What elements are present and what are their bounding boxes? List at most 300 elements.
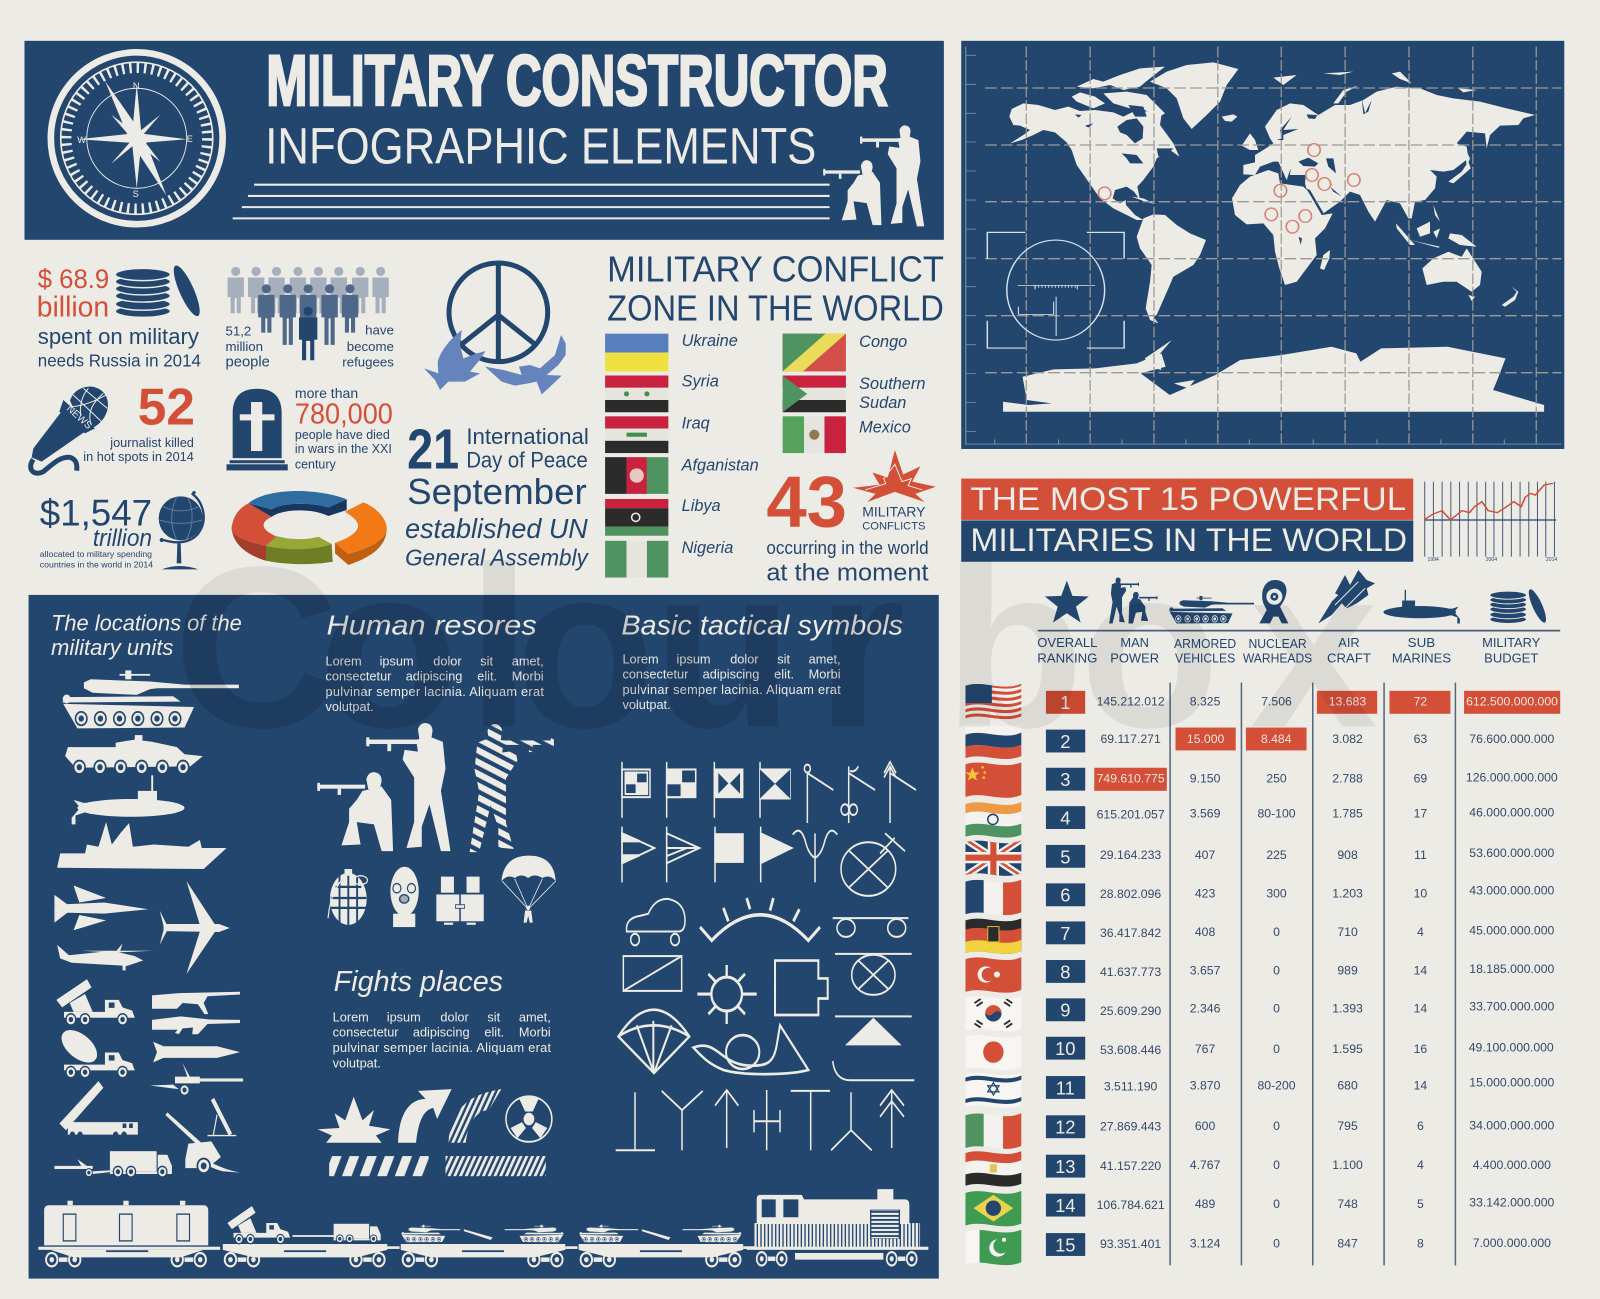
- stat: 1,547 trillion: allocated to military spending: [40, 549, 152, 559]
- text: fights places paragraph: Morbi: [519, 1025, 551, 1040]
- flag: Turkey: [965, 956, 1021, 995]
- row 1: USA: 1: [1060, 692, 1070, 713]
- text: International Day of Peace: International: [466, 424, 589, 449]
- text: tactical symbols paragraph: adipiscing: [703, 667, 759, 682]
- subtitle: INFOGRAPHIC ELEMENTS: [265, 117, 816, 174]
- row 9: South Korea: [965, 995, 1555, 1034]
- icon: bomber plane: [160, 881, 230, 974]
- stat: 1,547 trillion: $1,547: [40, 493, 152, 534]
- flag: China: [965, 761, 1021, 800]
- row 5: United Kingdom: 11: [1414, 848, 1427, 862]
- row 3: China: 9.150: [1190, 772, 1221, 786]
- text: human resources paragraph: Lorem: [326, 653, 362, 668]
- flag: Israel: [965, 1071, 1021, 1110]
- text: human resources paragraph: consectetur: [326, 669, 392, 684]
- tactical symbols: [616, 762, 916, 1150]
- text: human resources paragraph: volutpat.: [326, 699, 374, 714]
- text: tactical symbols paragraph: Morbi: [809, 667, 841, 682]
- stat: refugees people pictogram: [226, 267, 394, 370]
- icon: submarine: [72, 775, 185, 824]
- stat: 1,547 trillion: trillion: [93, 525, 152, 552]
- row 4: India: 3.569: [1190, 807, 1221, 821]
- row 10: Japan: 16: [1414, 1042, 1427, 1056]
- text: International Day of Peace: Day of Peace: [466, 447, 588, 472]
- row 10: Japan: 1.595: [1332, 1042, 1363, 1056]
- row 8: Turkey: 989: [1337, 963, 1358, 977]
- text: tactical symbols paragraph: Lorem: [622, 651, 659, 666]
- stat: 780,000 died: people have died: [295, 427, 390, 442]
- icon: striped arrow: [449, 1089, 501, 1143]
- text: human resources paragraph: dolor: [433, 653, 462, 668]
- row 14: Brazil: 489: [1195, 1197, 1215, 1211]
- stat: refugees people pictogram: become: [347, 339, 394, 354]
- icon: explosion: [318, 1097, 390, 1143]
- row 12: Italy: [965, 1112, 1555, 1151]
- banner: most 15 powerful militaries: MILITARIES IN THE WORLD: [970, 521, 1407, 558]
- text: human resources paragraph: Morbi: [512, 669, 544, 684]
- icon: standing soldier: [366, 723, 450, 851]
- text: fights places paragraph: pulvinar semper lacinia. Aliquam erat: [333, 1040, 551, 1055]
- icon: compass: W: [77, 135, 86, 145]
- flag: Brazil: [965, 1190, 1021, 1229]
- row 11: Israel: 680: [1337, 1078, 1358, 1092]
- row 8: Turkey: 8: [1060, 961, 1070, 982]
- row 11: Israel: [965, 1071, 1555, 1110]
- stat: 43 military conflicts: 43: [766, 462, 847, 543]
- row 8: Turkey: 0: [1273, 963, 1280, 977]
- table header icons: [1038, 570, 1560, 631]
- stat: 68.9 billion Russia: $ 68.9: [38, 264, 109, 294]
- map grid: [966, 47, 1562, 444]
- flag: Southern Sudan: [783, 375, 925, 412]
- row 8: Turkey: 41.637.773: [1100, 965, 1161, 979]
- row 15: Pakistan: 93.351.401: [1100, 1237, 1161, 1251]
- row 12: Italy: 27.869.443: [1100, 1120, 1161, 1134]
- row 5: United Kingdom: 225: [1266, 848, 1287, 862]
- row 8: Turkey: 3.657: [1190, 963, 1221, 977]
- watermark: Colourbox: [173, 519, 1378, 776]
- row 14: Brazil: 14: [1055, 1195, 1076, 1216]
- row 1: USA: 145.212.012: [1097, 695, 1165, 709]
- row 9: South Korea: 9: [1060, 1000, 1070, 1021]
- flag: Afghanistan: Afganistan: [681, 456, 759, 474]
- flag: Germany: [965, 917, 1021, 957]
- heading: conflict zones: [607, 250, 944, 328]
- icon: coins: [1490, 587, 1549, 624]
- icon: binoculars: [436, 877, 484, 925]
- icon: rocket truck: [56, 979, 135, 1026]
- panel: header banner: [24, 41, 944, 240]
- row 5: United Kingdom: [965, 839, 1555, 878]
- text: tactical symbols paragraph: dolor: [730, 651, 759, 666]
- text: International Day of Peace: September: [407, 472, 587, 512]
- row 1: USA: 13.683: [1329, 695, 1366, 709]
- table column headings: MARINES: [1392, 650, 1451, 665]
- header speed lines: [233, 185, 830, 218]
- icon: peace sign with doves: [424, 263, 566, 394]
- flag: Iraq: Iraq: [682, 415, 710, 433]
- flag: Egypt: [965, 1151, 1022, 1187]
- flag: Syria: [605, 373, 719, 412]
- icon: compass: E: [187, 134, 193, 144]
- stat: 43 military conflicts: CONFLICTS: [862, 521, 926, 533]
- row 7: Germany: 45.000.000.000: [1469, 923, 1555, 937]
- row 7: Germany: 4: [1417, 925, 1424, 939]
- stat: refugees people pictogram: refugees: [342, 354, 394, 369]
- stat: 43 military conflicts: MILITARY: [862, 504, 926, 519]
- row 15: Pakistan: 847: [1337, 1236, 1358, 1250]
- row 12: Italy: 6: [1417, 1119, 1424, 1133]
- text: fights places paragraph: Lorem: [333, 1009, 369, 1024]
- stat: journalists killed: 52: [138, 378, 195, 436]
- row 4: India: 80-100: [1257, 807, 1296, 821]
- icon: paratrooper: [501, 856, 556, 923]
- icon: grenade: [328, 869, 367, 925]
- icon: howitzer: [165, 1112, 240, 1174]
- table column headings: NUCLEAR: [1248, 636, 1307, 651]
- row 3: China: [965, 761, 1558, 800]
- row 11: Israel: 14: [1414, 1078, 1427, 1092]
- text: International Day of Peace: [405, 417, 589, 570]
- icon: missile: [153, 1042, 240, 1062]
- stat: 780,000 died: more than: [295, 386, 358, 402]
- row 4: India: [965, 802, 1554, 838]
- row 9: South Korea: 25.609.290: [1100, 1004, 1161, 1018]
- icon: news microphone: NEWS: [64, 403, 94, 432]
- row 10: Japan: 767: [1195, 1042, 1215, 1056]
- row 14: Brazil: 0: [1273, 1197, 1280, 1211]
- row 2: Russia: 69.117.271: [1100, 732, 1161, 746]
- row 9: South Korea: 0: [1273, 1002, 1280, 1016]
- table column dividers: [1170, 683, 1455, 1265]
- chart: line trend 1994-2014: 2004: [1486, 557, 1497, 563]
- row 7: Germany: 408: [1195, 925, 1215, 939]
- flag: Afghanistan: [605, 456, 759, 494]
- heading: conflict zones: MILITARY CONFLICT: [607, 250, 944, 290]
- chart: line trend 1994-2014: [1425, 482, 1557, 563]
- text: fights places paragraph: ipsum: [387, 1009, 421, 1024]
- table column headings: [1037, 635, 1540, 665]
- row 15: Pakistan: 3.124: [1190, 1236, 1221, 1250]
- text: human resources paragraph: amet,: [512, 653, 544, 668]
- heading: locations of military units: military units: [51, 635, 173, 660]
- row 11: Israel: 80-200: [1257, 1078, 1296, 1092]
- fight place icons: [318, 1089, 552, 1176]
- row 6: France: 300: [1266, 886, 1287, 900]
- flag: India: [965, 802, 1022, 838]
- text: fights places paragraph: adipiscing: [413, 1025, 470, 1040]
- row 11: Israel: 11: [1056, 1077, 1075, 1098]
- icon: radar truck: [64, 1053, 135, 1079]
- row 13: Egypt: 4: [1417, 1158, 1424, 1172]
- row 4: India: 4: [1060, 808, 1070, 829]
- row 6: France: 10: [1414, 886, 1427, 900]
- table column headings: BUDGET: [1484, 650, 1538, 665]
- row 5: United Kingdom: 908: [1337, 848, 1358, 862]
- table column headings: WARHEADS: [1243, 650, 1312, 665]
- icon: tombstone: [227, 389, 288, 470]
- icon: striped soldier: [470, 724, 554, 852]
- stat: 68.9 billion Russia: billion: [37, 291, 109, 323]
- stat: journalists killed: in hot spots in 2014: [83, 449, 194, 464]
- row 13: Egypt: 4.767: [1190, 1158, 1221, 1172]
- row 14: Brazil: [965, 1190, 1555, 1229]
- stat: 1,547 trillion: [40, 491, 204, 569]
- flag: Southern Sudan: Southern: [859, 375, 925, 393]
- row 12: Italy: 34.000.000.000: [1469, 1119, 1555, 1133]
- watermark: [183, 560, 1376, 729]
- panel: military units and symbols: [29, 595, 939, 1279]
- row 15: Pakistan: 7.000.000.000: [1473, 1236, 1551, 1250]
- stat: 43 military conflicts: [766, 450, 936, 587]
- row 6: France: 28.802.096: [1100, 887, 1161, 901]
- flag: Congo: Congo: [859, 333, 907, 351]
- row 8: Turkey: 18.185.000.000: [1469, 962, 1555, 976]
- Antarctica: [1003, 340, 1544, 412]
- flag: Italy: [965, 1112, 1021, 1151]
- stat: refugees people pictogram: million: [226, 339, 263, 354]
- row 8: Turkey: 14: [1414, 963, 1427, 977]
- row 3: China: 250: [1266, 772, 1287, 786]
- stat: 780,000 died: century: [295, 456, 336, 471]
- flag: Syria: Syria: [682, 373, 719, 391]
- icon: tank: [1170, 596, 1254, 624]
- flag: South Korea: [965, 995, 1021, 1034]
- row 14: Brazil: 748: [1337, 1197, 1358, 1211]
- title: MILITARY CONSTRUCTOR: [266, 41, 888, 121]
- row 1: USA: [965, 683, 1560, 721]
- row 11: Israel: 3.870: [1190, 1078, 1221, 1092]
- row 9: South Korea: 33.700.000.000: [1469, 1000, 1555, 1014]
- row 7: Germany: 0: [1273, 925, 1280, 939]
- row 10: Japan: 0: [1273, 1042, 1280, 1056]
- text: fights places paragraph: volutpat.: [333, 1055, 381, 1070]
- row 2: Russia: 15.000: [1187, 732, 1225, 746]
- row 13: Egypt: [965, 1151, 1550, 1187]
- military vehicles column: [54, 670, 243, 1178]
- stat: refugees people pictogram: 51,2: [226, 324, 251, 339]
- row 12: Italy: 795: [1337, 1119, 1358, 1133]
- heading: conflict zones: ZONE IN THE WORLD: [607, 288, 944, 328]
- row 12: Italy: 600: [1195, 1119, 1215, 1133]
- text: human resources paragraph: adipiscing: [406, 669, 462, 684]
- row 10: Japan: [965, 1034, 1554, 1072]
- row 3: China: 749.610.775: [1097, 772, 1165, 786]
- row 3: China: 126.000.000.000: [1466, 771, 1558, 785]
- row 14: Brazil: 33.142.000.000: [1469, 1196, 1555, 1210]
- table column headings: POWER: [1110, 650, 1159, 665]
- icon: mortar: [208, 1099, 236, 1136]
- heading: tactical symbols: Basic tactical symbols: [621, 610, 903, 641]
- flat car with tanks and gun: [401, 1225, 578, 1266]
- flag: Russia: [965, 732, 1022, 759]
- row 12: Italy: 0: [1273, 1119, 1280, 1133]
- row 11: Israel: 15.000.000.000: [1469, 1076, 1555, 1090]
- icon: radiation sign: [506, 1096, 552, 1142]
- table column headings: MAN: [1120, 635, 1149, 650]
- heading: locations of military units: The locations of the: [51, 611, 242, 636]
- Eurasia Africa Oceania: [1232, 72, 1535, 307]
- chart: 3D ring diagram: [232, 491, 387, 565]
- text: human resources paragraph: ipsum: [380, 653, 414, 668]
- chart: line trend 1994-2014: 1994: [1428, 557, 1439, 563]
- row 6: France: 1.203: [1332, 886, 1363, 900]
- text: fights places paragraph: consectetur: [333, 1025, 399, 1040]
- stat: 780,000 died: in wars in the XXI: [295, 441, 392, 456]
- flag: Libya: Libya: [682, 497, 721, 515]
- stat: refugees people pictogram: people: [226, 354, 270, 370]
- stat: journalists killed: journalist killed: [109, 435, 194, 450]
- text: fights places paragraph: amet,: [519, 1009, 551, 1024]
- icon: nuclear warhead: [1259, 580, 1288, 623]
- text: fights places paragraph: sit: [487, 1009, 501, 1024]
- wagon: [38, 1201, 220, 1266]
- text: tactical symbols paragraph: elit.: [774, 667, 794, 682]
- row 7: Germany: 36.417.842: [1100, 926, 1161, 940]
- row 9: South Korea: 14: [1414, 1002, 1427, 1016]
- icon: warship: [57, 822, 227, 869]
- flag: Mexico: Mexico: [859, 419, 911, 437]
- stat: journalists killed: [31, 378, 195, 473]
- row 2: Russia: 76.600.000.000: [1469, 732, 1555, 746]
- icon: news microphone: [31, 387, 108, 473]
- icon: kneeling soldier: [317, 772, 393, 851]
- stat: 68.9 billion Russia: spent on military: [38, 324, 200, 349]
- table column headings: VEHICLES: [1175, 650, 1235, 665]
- icon: jets: [1318, 570, 1375, 623]
- flag: Japan: [966, 1035, 1021, 1070]
- row 6: France: 423: [1195, 886, 1215, 900]
- row 5: United Kingdom: 53.600.000.000: [1469, 846, 1555, 860]
- table column headings: ARMORED: [1174, 636, 1236, 651]
- row 1: USA: 8.325: [1190, 695, 1221, 709]
- flag: Ukraine: [605, 332, 738, 371]
- row 3: China: 2.788: [1332, 772, 1363, 786]
- text: tactical symbols paragraph: pulvinar semper lacinia. Aliquam erat: [622, 682, 841, 697]
- stat: 1,547 trillion: countries in the world in 2014: [40, 559, 153, 569]
- row 13: Egypt: 4.400.000.000: [1473, 1158, 1551, 1172]
- chart: line trend 1994-2014: 2014: [1546, 557, 1557, 563]
- text: fights places paragraph: elit.: [484, 1025, 504, 1040]
- icon: attack arrow: [398, 1089, 452, 1143]
- text: International Day of Peace: established UN: [405, 513, 588, 544]
- icon: red explosion: [853, 450, 936, 502]
- text: human resources paragraph: sit: [480, 653, 494, 668]
- flat car with rocket truck and cargo truck: [223, 1206, 400, 1266]
- stat: refugees people pictogram: have: [365, 323, 394, 338]
- icon: assault rifle: [152, 1016, 240, 1034]
- banner: most 15 powerful militaries: [961, 479, 1413, 562]
- heading: fights places: Fights places: [334, 966, 503, 998]
- row 14: Brazil: 106.784.621: [1097, 1198, 1165, 1212]
- hazard stripe bar: [329, 1156, 429, 1176]
- row 2: Russia: 8.484: [1261, 732, 1292, 746]
- stat: 68.9 billion Russia: needs Russia in 2014: [38, 350, 201, 370]
- row 3: China: 69: [1414, 772, 1427, 786]
- icon: header soldiers: [823, 125, 924, 226]
- fine hazard stripe bar: [446, 1156, 546, 1176]
- panel: world map: [961, 41, 1564, 449]
- row 4: India: 1.785: [1332, 807, 1363, 821]
- flag: Iraq: [605, 415, 710, 453]
- row 10: Japan: 10: [1055, 1038, 1076, 1059]
- symbols bottom row: [616, 1090, 904, 1150]
- icon: compass: N: [133, 81, 140, 91]
- row 11: Israel: 3.511.190: [1104, 1079, 1158, 1093]
- row 12: Italy: 12: [1055, 1117, 1076, 1138]
- row 9: South Korea: 1.393: [1332, 1002, 1363, 1016]
- icon: soldiers: [1109, 578, 1157, 624]
- icon: machine gun: [152, 992, 240, 1014]
- row 4: India: 615.201.057: [1097, 808, 1165, 822]
- conflict location markers: [1098, 144, 1360, 233]
- flag symbols row 2: [622, 827, 905, 896]
- icon: scope reticle: [987, 232, 1124, 348]
- row 5: United Kingdom: 5: [1060, 846, 1070, 867]
- text: human resources paragraph: pulvinar semper lacinia. Aliquam erat: [326, 684, 544, 699]
- row 13: Egypt: 1.100: [1332, 1158, 1363, 1172]
- flag: Libya: [605, 497, 721, 536]
- row 6: France: 43.000.000.000: [1469, 884, 1555, 898]
- text: tactical symbols paragraph: consectetur: [622, 667, 689, 682]
- text: tactical symbols paragraph: amet,: [809, 651, 841, 666]
- locomotive: [747, 1189, 928, 1265]
- flag: Southern Sudan: Sudan: [859, 394, 906, 412]
- text: tactical symbols paragraph: sit: [777, 651, 790, 666]
- row 13: Egypt: 41.157.220: [1100, 1159, 1161, 1173]
- row 1: USA: 7.506: [1261, 695, 1292, 709]
- text: tactical symbols paragraph: volutpat.: [622, 697, 671, 712]
- row 8: Turkey: [965, 956, 1555, 995]
- icon: compass: S: [133, 189, 139, 199]
- row 2: Russia: [965, 728, 1554, 759]
- text: fights places paragraph: dolor: [440, 1009, 470, 1024]
- row 2: Russia: 3.082: [1332, 732, 1363, 746]
- row 2: Russia: 2: [1060, 731, 1070, 752]
- stat: 68.9 billion Russia: [37, 263, 204, 370]
- row 9: South Korea: 2.346: [1190, 1002, 1221, 1016]
- row 10: Japan: 49.100.000.000: [1469, 1041, 1554, 1055]
- icon: armored vehicle: [65, 735, 203, 775]
- text: human resources paragraph: elit.: [477, 669, 497, 684]
- row 1: USA: 612.500.000.000: [1466, 695, 1558, 709]
- icon: compass: [51, 52, 223, 224]
- text: International Day of Peace: General Assembly: [405, 544, 589, 570]
- flag: France: [965, 879, 1021, 917]
- icon: truck towing gun: [54, 1151, 172, 1178]
- icon: missile launcher: [59, 1081, 138, 1138]
- banner: most 15 powerful militaries: THE MOST 15 POWERFUL: [970, 480, 1406, 517]
- row 4: India: 17: [1414, 807, 1427, 821]
- heading: locations of military units: [51, 611, 242, 660]
- icon: gas mask: [390, 867, 419, 927]
- row 6: France: [965, 879, 1555, 917]
- table column headings: OVERALL: [1037, 635, 1097, 650]
- row 7: Germany: [965, 918, 1554, 954]
- row 5: United Kingdom: 29.164.233: [1100, 848, 1161, 862]
- flag: Mexico: [783, 416, 911, 453]
- flag: Ukraine: Ukraine: [682, 332, 738, 350]
- row 13: Egypt: 13: [1055, 1156, 1076, 1177]
- icon: submarine: [1383, 590, 1460, 623]
- row 15: Pakistan: 0: [1273, 1236, 1280, 1250]
- row 15: Pakistan: [965, 1229, 1551, 1267]
- row 15: Pakistan: 8: [1417, 1236, 1424, 1250]
- stat: 780,000 died: 780,000: [295, 398, 393, 430]
- conflict flags list: [605, 332, 925, 578]
- row 14: Brazil: 5: [1417, 1197, 1424, 1211]
- stat: 43 military conflicts: occurring in the world: [766, 537, 929, 558]
